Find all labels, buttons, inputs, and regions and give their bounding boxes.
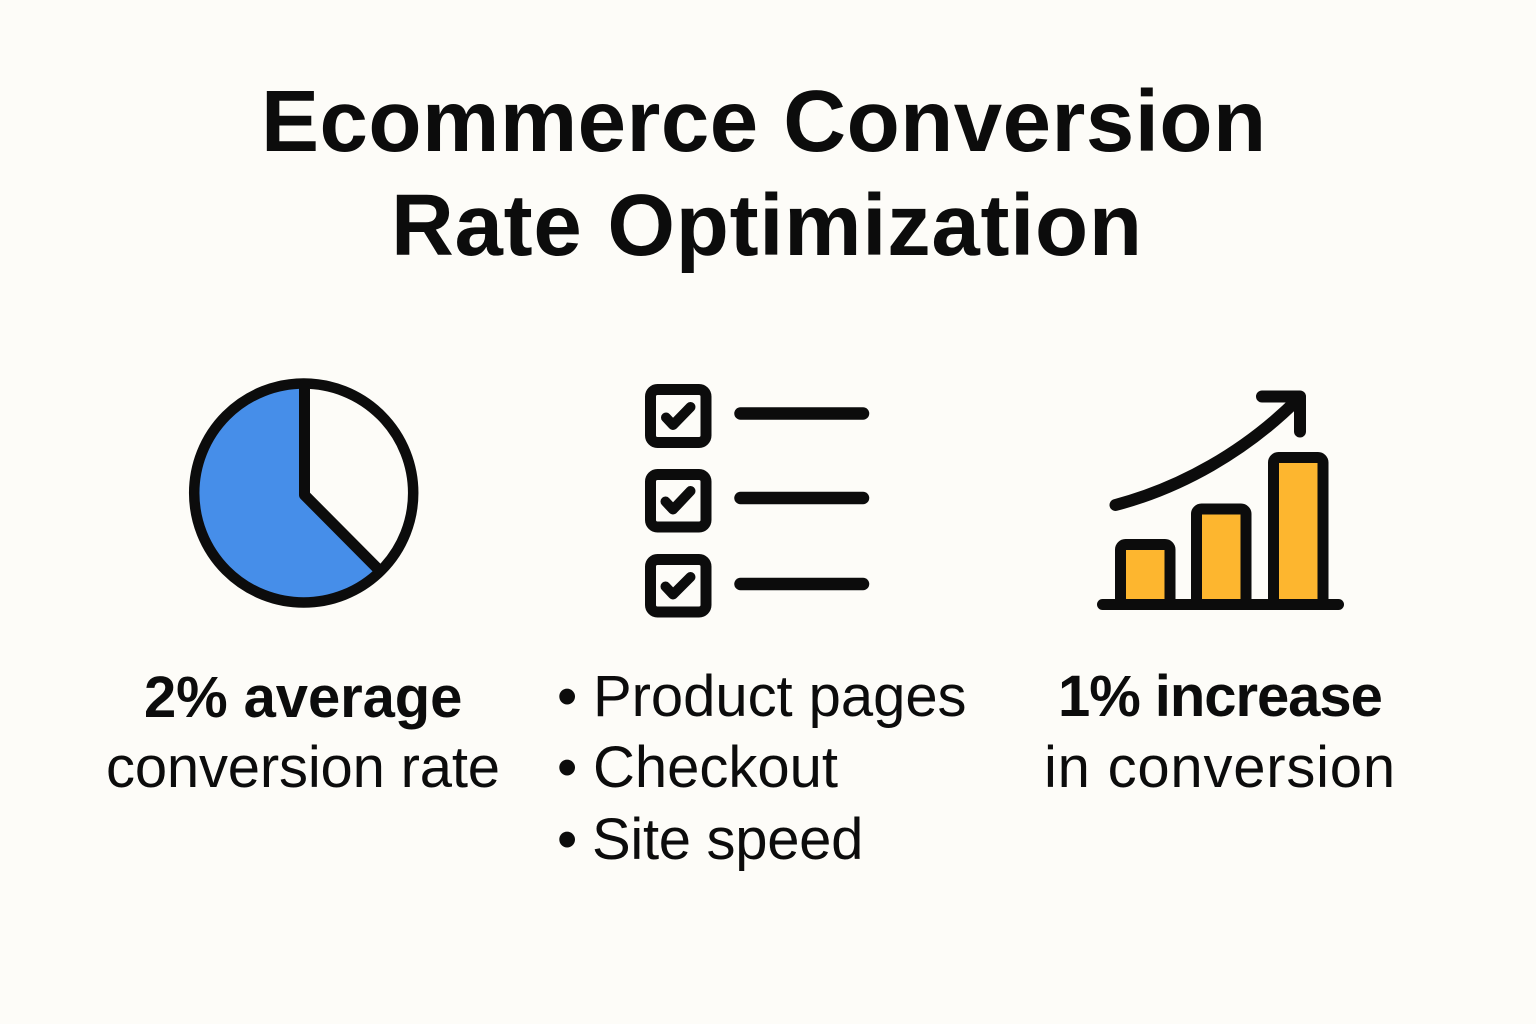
- text: average conversion rate: 2% average: [144, 665, 462, 730]
- icon: rising bar chart: [1097, 390, 1344, 610]
- text: optimization list: •: [557, 664, 577, 729]
- title: Ecommerce Conversion: [261, 73, 1267, 170]
- text: optimization list: •: [557, 807, 577, 872]
- text: increase in conversion: in conversion: [1044, 735, 1396, 800]
- text: optimization list: •: [557, 735, 577, 800]
- icon: pie chart: [188, 378, 418, 608]
- text: average conversion rate: conversion rate: [106, 735, 500, 800]
- text: increase in conversion: 1% increase: [1058, 664, 1382, 729]
- text: optimization list: [557, 664, 967, 872]
- text: average conversion rate: [106, 665, 500, 800]
- text: optimization list: Site speed: [592, 807, 863, 872]
- title: Rate Optimization: [391, 177, 1143, 274]
- title: [261, 73, 1267, 274]
- text: optimization list: Product pages: [593, 664, 967, 729]
- text: increase in conversion: [1044, 664, 1396, 800]
- text: optimization list: Checkout: [593, 735, 838, 800]
- icon: checklist: [645, 384, 870, 618]
